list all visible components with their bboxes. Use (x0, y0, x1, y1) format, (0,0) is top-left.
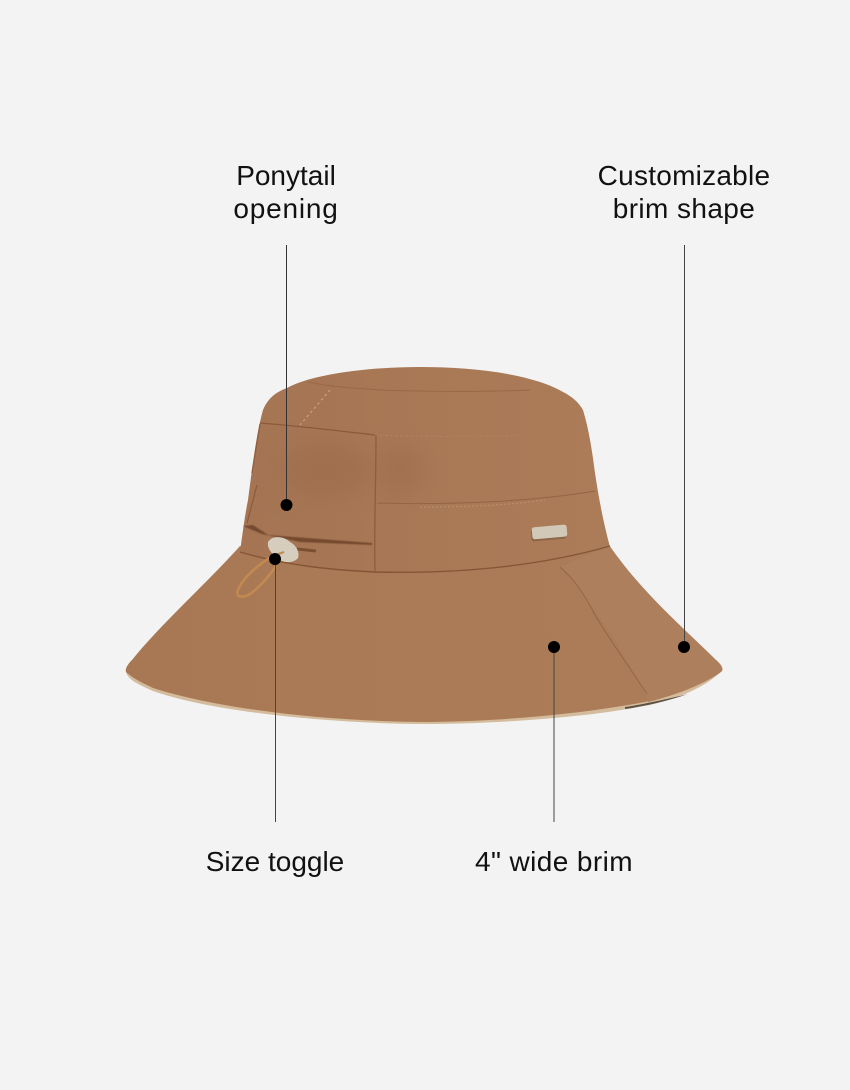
ponytail opening (243, 525, 372, 545)
drawcord (297, 549, 316, 551)
leader line: ponytail opening (280, 245, 292, 511)
label: customizable brim shape: Customizable (598, 160, 770, 191)
label: ponytail opening (233, 160, 339, 224)
label: 4 inch wide brim: 4" wide brim (475, 846, 633, 877)
label: ponytail opening: Ponytail (236, 160, 336, 191)
crown (240, 367, 610, 572)
brim seam (560, 567, 647, 694)
brim side panel (560, 546, 722, 702)
label: customizable brim shape (598, 160, 770, 224)
brim lining shadow (625, 694, 688, 709)
crown shading (312, 464, 340, 476)
leader line: size toggle (269, 553, 281, 822)
brim lining (126, 671, 722, 724)
leader line: 4 inch wide brim (548, 641, 560, 822)
label: customizable brim shape: brim shape (613, 193, 755, 224)
crown seams (240, 382, 610, 572)
size toggle (268, 537, 299, 562)
chart: annotated hat diagram (126, 245, 722, 822)
label: size toggle: Size toggle (206, 846, 344, 877)
label: ponytail opening: opening (233, 193, 339, 224)
metal badge (531, 524, 567, 542)
drawcord loop (237, 552, 283, 597)
leader line: customizable brim shape (678, 245, 690, 653)
brim (126, 545, 722, 722)
drawcord over toggle (270, 552, 284, 557)
icon: bucket hat (126, 367, 722, 724)
